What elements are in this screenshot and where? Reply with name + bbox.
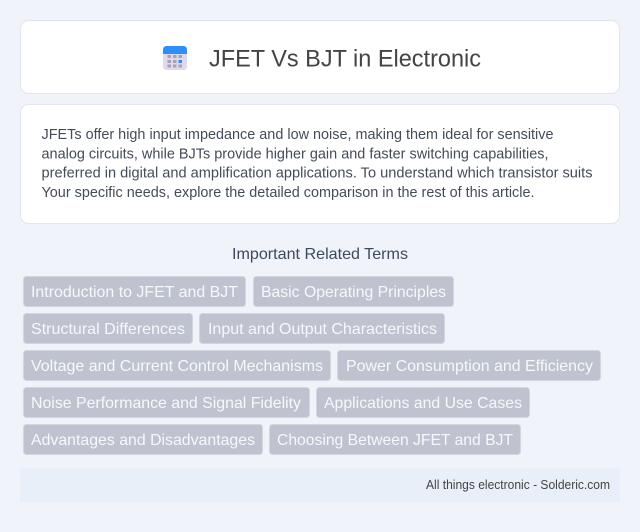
tag: Input and Output Characteristics: Input and Output Characteristics: [208, 321, 437, 338]
tag: Noise Performance and Signal Fidelity: [24, 388, 310, 418]
tag: Basic Operating Principles: [254, 276, 454, 306]
panel: term tags: [24, 276, 600, 454]
tag: Choosing Between JFET and BJT: Choosing Between JFET and BJT: [277, 432, 513, 449]
tag: Voltage and Current Control Mechanisms: Voltage and Current Control Mechanisms: [31, 358, 323, 375]
heading: related terms: Important Related Terms: [232, 246, 408, 263]
text block: summary: JFETs offer high input impedance and low noise, making them ideal for sensitive: [42, 127, 554, 143]
text block: summary: preferred in digital and amplification applications. To understand which transistor suits: [42, 166, 592, 182]
tag: Power Consumption and Efficiency: Power Consumption and Efficiency: [346, 358, 593, 375]
text block: summary: analog circuits, while BJTs provide higher gain and faster switching capabilities,: [42, 146, 548, 162]
panel: footer: [20, 468, 620, 502]
tag: Basic Operating Principles: Basic Operating Principles: [261, 284, 446, 301]
tag: Advantages and Disadvantages: [24, 424, 262, 454]
footer credit: All things electronic - Solderic.com: [426, 478, 610, 492]
tag: Voltage and Current Control Mechanisms: [24, 350, 330, 380]
tag: Power Consumption and Efficiency: [338, 350, 600, 380]
tag: Noise Performance and Signal Fidelity: Noise Performance and Signal Fidelity: [31, 395, 301, 412]
tag: Introduction to JFET and BJT: Introduction to JFET and BJT: [31, 284, 238, 301]
panel: summary paragraph: [20, 104, 620, 224]
tag: Structural Differences: Structural Differences: [31, 321, 185, 338]
tag: Applications and Use Cases: Applications and Use Cases: [324, 395, 522, 412]
text block: summary: Your specific needs, explore the detailed comparison in the rest of this article.: [42, 185, 534, 201]
panel: title card: [20, 20, 620, 94]
tag: Input and Output Characteristics: [200, 314, 444, 344]
icon: calendar: [163, 46, 187, 70]
tag: Introduction to JFET and BJT: [24, 276, 246, 306]
tag: Applications and Use Cases: [316, 388, 530, 418]
tag: Advantages and Disadvantages: Advantages and Disadvantages: [31, 432, 255, 449]
tag: Structural Differences: [24, 314, 192, 344]
text block: summary: [42, 127, 592, 201]
tag: Choosing Between JFET and BJT: [270, 424, 520, 454]
title: JFET Vs BJT in Electronic: [209, 46, 481, 72]
